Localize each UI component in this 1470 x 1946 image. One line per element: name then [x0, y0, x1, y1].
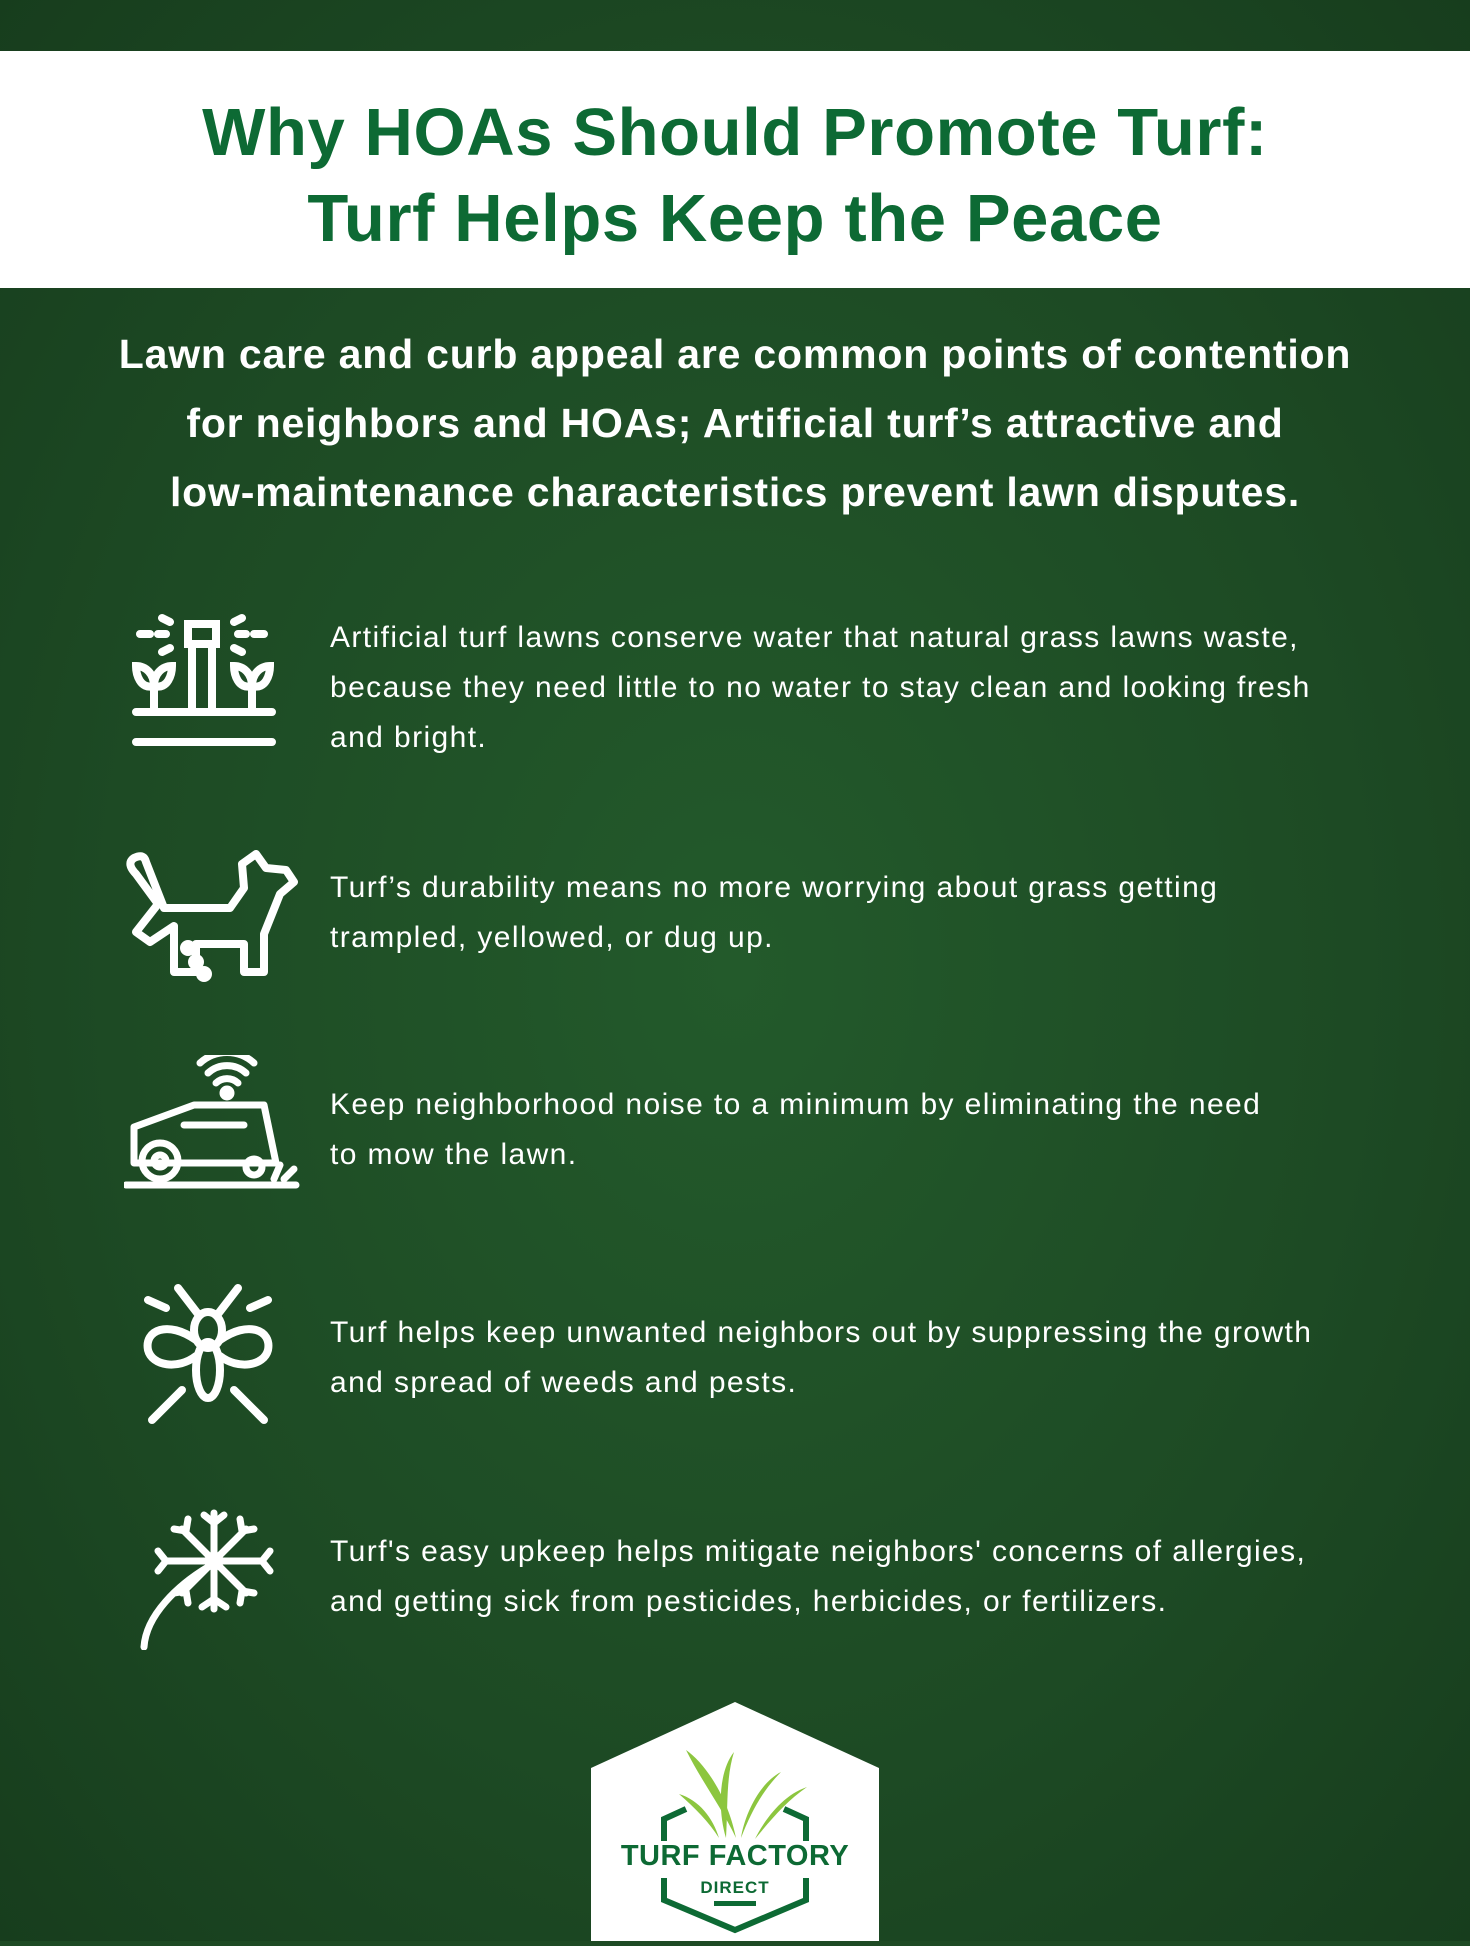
logo: DIRECT	[700, 1878, 770, 1897]
text: durability: Turf’s durability means no more worrying about grass getting	[330, 871, 1218, 904]
text: durability: trampled, yellowed, or dug up.	[330, 921, 774, 954]
logo	[591, 1702, 879, 1941]
icon: pollen / dandelion	[140, 1510, 274, 1650]
text: allergies: Turf's easy upkeep helps mitigate neighbors' concerns of allergies,	[330, 1535, 1306, 1568]
text: noise: Keep neighborhood noise to a minimum by eliminating the need	[330, 1088, 1261, 1121]
text: allergies	[330, 1535, 1306, 1618]
text: water: and bright.	[330, 721, 487, 754]
text: allergies: and getting sick from pesticides, herbicides, or fertilizers.	[330, 1585, 1167, 1618]
subtitle: Lawn care and curb appeal are common points of contention	[119, 331, 1351, 377]
icon: robot mower	[124, 1055, 300, 1188]
title	[202, 95, 1268, 256]
logo text: TURF FACTORY	[621, 1840, 849, 1872]
text: noise: to mow the lawn.	[330, 1138, 578, 1171]
subtitle: for neighbors and HOAs; Artificial turf’s attractive and	[186, 400, 1284, 446]
text: water	[330, 621, 1311, 754]
icon: bug	[144, 1284, 272, 1424]
text: pests: and spread of weeds and pests.	[330, 1366, 797, 1399]
grass blades	[679, 1750, 807, 1839]
text: water: Artificial turf lawns conserve water that natural grass lawns waste,	[330, 621, 1299, 654]
title: Turf Helps Keep the Peace	[307, 181, 1163, 256]
subtitle: low-maintenance characteristics prevent lawn disputes.	[170, 469, 1300, 515]
text: pests	[330, 1316, 1312, 1399]
subtitle	[119, 331, 1351, 515]
title: Why HOAs Should Promote Turf:	[202, 95, 1268, 170]
header	[0, 51, 1470, 288]
icon: dog	[126, 850, 298, 982]
text: pests: Turf helps keep unwanted neighbors out by suppressing the growth	[330, 1316, 1312, 1349]
text: noise	[330, 1088, 1261, 1171]
text: durability	[330, 871, 1218, 954]
text: water: because they need little to no water to stay clean and looking fresh	[330, 671, 1311, 704]
icon: sprinkler	[132, 614, 276, 746]
